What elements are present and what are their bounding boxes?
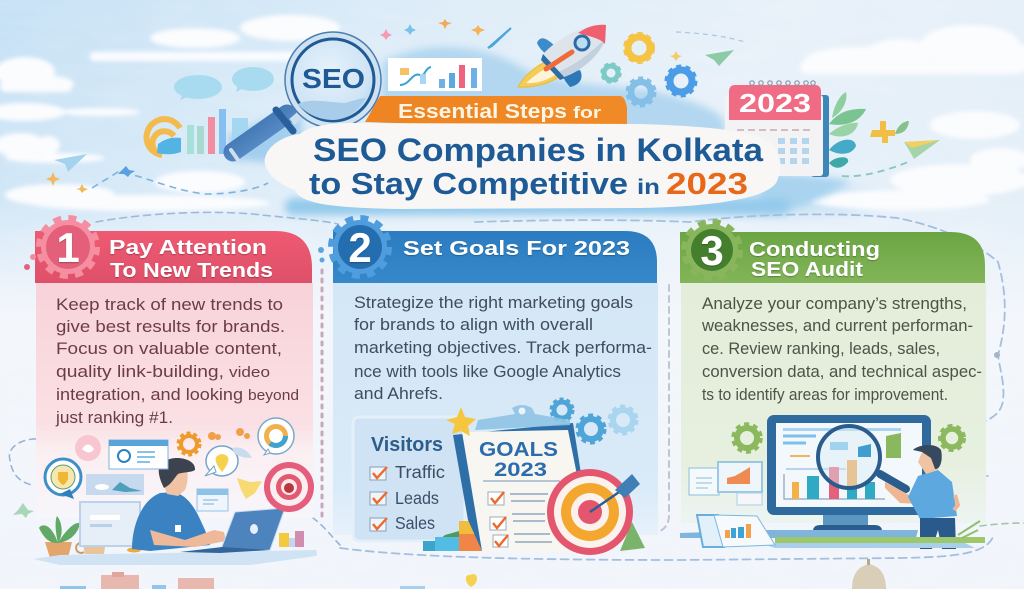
main title: SEO Companies in Kolkata [313, 132, 763, 168]
visitors checklist card: Traffic [395, 462, 445, 482]
chat bubbles [174, 67, 274, 100]
illustration: goals checklist and target [353, 399, 645, 555]
clipboard: GOALS [479, 439, 558, 461]
panel 2 gear number: 2 [348, 224, 372, 271]
panel 2 heading: Set Goals For 2023 [403, 237, 630, 260]
target [264, 462, 314, 512]
magnifying glass [818, 426, 906, 489]
plant and coffee [39, 516, 141, 560]
panel 2 body [333, 283, 658, 535]
orange sparkles [208, 428, 250, 440]
orange ribbon: Essential Steps [398, 101, 567, 123]
map card [86, 474, 144, 495]
back screen [80, 502, 140, 546]
clouds [0, 15, 1024, 211]
yellow puzzle and leaf [870, 121, 909, 143]
clipboard [453, 405, 590, 551]
idea bubble [205, 446, 252, 476]
panel 2: Set Goals For 2023 [318, 218, 658, 535]
panel 1 text: integration, and looking [56, 385, 243, 404]
panel 2 text: nce with tools like Google Analytics [354, 362, 621, 381]
panel 3 heading: SEO Audit [751, 258, 863, 281]
small charts behind magnifier [46, 67, 274, 194]
panel 1 header [35, 231, 312, 283]
panel 1 heading: To New Trends [110, 259, 273, 282]
panel 3 text: Analyze your company’s strengths, [702, 294, 967, 313]
rocket [518, 25, 606, 87]
calendar 2023 [725, 81, 866, 177]
yellow-green paper plane [842, 140, 940, 176]
small window [197, 489, 228, 511]
small sparkles [46, 172, 88, 193]
visitors checklist card: Sales [395, 513, 435, 533]
side charts [689, 462, 762, 505]
panel 1 text: Focus on valuable content, [56, 339, 282, 358]
dashed flight path [92, 172, 268, 194]
calendar 2023: 2023 [739, 88, 811, 118]
swirl icon [147, 119, 181, 155]
panel 2 text: marketing objectives. Track performa- [354, 338, 652, 357]
panel 3 text: ce. Review ranking, leads, sales, [702, 339, 940, 358]
blue watercolor wash behind title [228, 47, 852, 215]
person [885, 445, 958, 549]
panel 1: Pay Attention To New Trends [24, 218, 313, 518]
panel 3 header [680, 232, 985, 283]
orange ribbon [365, 96, 627, 126]
clipboard: 2023 [494, 460, 547, 481]
illustration: person working at laptop [13, 418, 317, 565]
shield bubble [45, 459, 81, 499]
panel 1 text: just ranking #1. [55, 408, 173, 427]
like bubble [75, 435, 101, 461]
magnifying glass with SEO [231, 32, 381, 160]
illustration: SEO audit on monitor [680, 415, 985, 589]
panel 1 gear number [24, 218, 97, 276]
browser window [109, 440, 168, 469]
desk [33, 550, 317, 565]
main title: to Stay Competitive [309, 166, 628, 201]
panel 1 heading [109, 236, 273, 282]
target with arrow [547, 469, 645, 555]
panel 3: Conducting SEO Audit [680, 222, 986, 523]
panel 1 body [36, 283, 313, 518]
star [446, 407, 476, 436]
panel 1 gear number: 1 [56, 224, 80, 271]
green gears [733, 424, 964, 452]
monitor [767, 415, 931, 530]
panel 2 header [333, 231, 657, 283]
panel 1 text: Keep track of new trends to [56, 295, 283, 314]
main title [309, 132, 763, 201]
donut chart bubble [258, 418, 294, 455]
white cloud [265, 123, 780, 209]
panel 1 text: video [229, 365, 270, 381]
tablet [697, 515, 775, 547]
laptop [180, 508, 285, 553]
desk [680, 521, 985, 548]
panel 3 gear number [684, 222, 740, 278]
panel 1 text: give best results for brands. [56, 317, 285, 336]
visitors checklist card: Visitors [371, 434, 443, 456]
panel 2 gear number [318, 218, 389, 276]
dashed connector paths [9, 212, 1024, 560]
paper plane left [54, 154, 87, 172]
dome skyline [852, 559, 886, 589]
gear icon [178, 433, 200, 455]
panel 3 text: conversion data, and technical aspec- [702, 362, 982, 381]
bar chart [187, 109, 248, 154]
panel 2 text [354, 293, 652, 403]
panel 3 heading: Conducting [749, 238, 880, 261]
panel 2 text: Strategize the right marketing goals [354, 293, 633, 312]
visitors checklist card [353, 417, 465, 541]
panel 3 body [681, 283, 986, 523]
panel 2 text: for brands to align with overall [354, 315, 593, 334]
main title: in [637, 176, 660, 199]
decorative sparkles [380, 19, 511, 48]
panel 1 heading: Pay Attention [109, 236, 267, 259]
SEO label: SEO [302, 63, 365, 94]
panel 2 text: and Ahrefs. [354, 384, 443, 403]
orange ribbon: for [573, 103, 601, 122]
blue star [118, 166, 135, 177]
panel 1 text: beyond [248, 388, 299, 404]
handle [231, 110, 300, 160]
green star [13, 503, 34, 518]
person [132, 458, 226, 551]
panel 3 text [701, 294, 982, 404]
panel 3 text: ts to identify areas for improvement. [702, 385, 948, 404]
sticky note [237, 478, 262, 499]
leaves [829, 92, 866, 168]
main title: 2023 [666, 166, 748, 201]
green paper plane [670, 32, 745, 66]
chart card [388, 58, 482, 91]
panel 3 text: weaknesses, and current performan- [701, 316, 973, 335]
bottles [279, 531, 304, 547]
skyline buildings [60, 572, 477, 589]
panel 1 text: quality link-building, [56, 362, 224, 381]
panel 3 heading [749, 238, 880, 281]
visitors checklist card: Leads [395, 488, 439, 508]
gears [551, 399, 637, 443]
stacked blocks [423, 521, 482, 551]
panel 1 text [55, 295, 299, 427]
gears cluster [602, 34, 696, 106]
title block [265, 96, 780, 209]
panel 3 gear number: 3 [700, 227, 724, 274]
